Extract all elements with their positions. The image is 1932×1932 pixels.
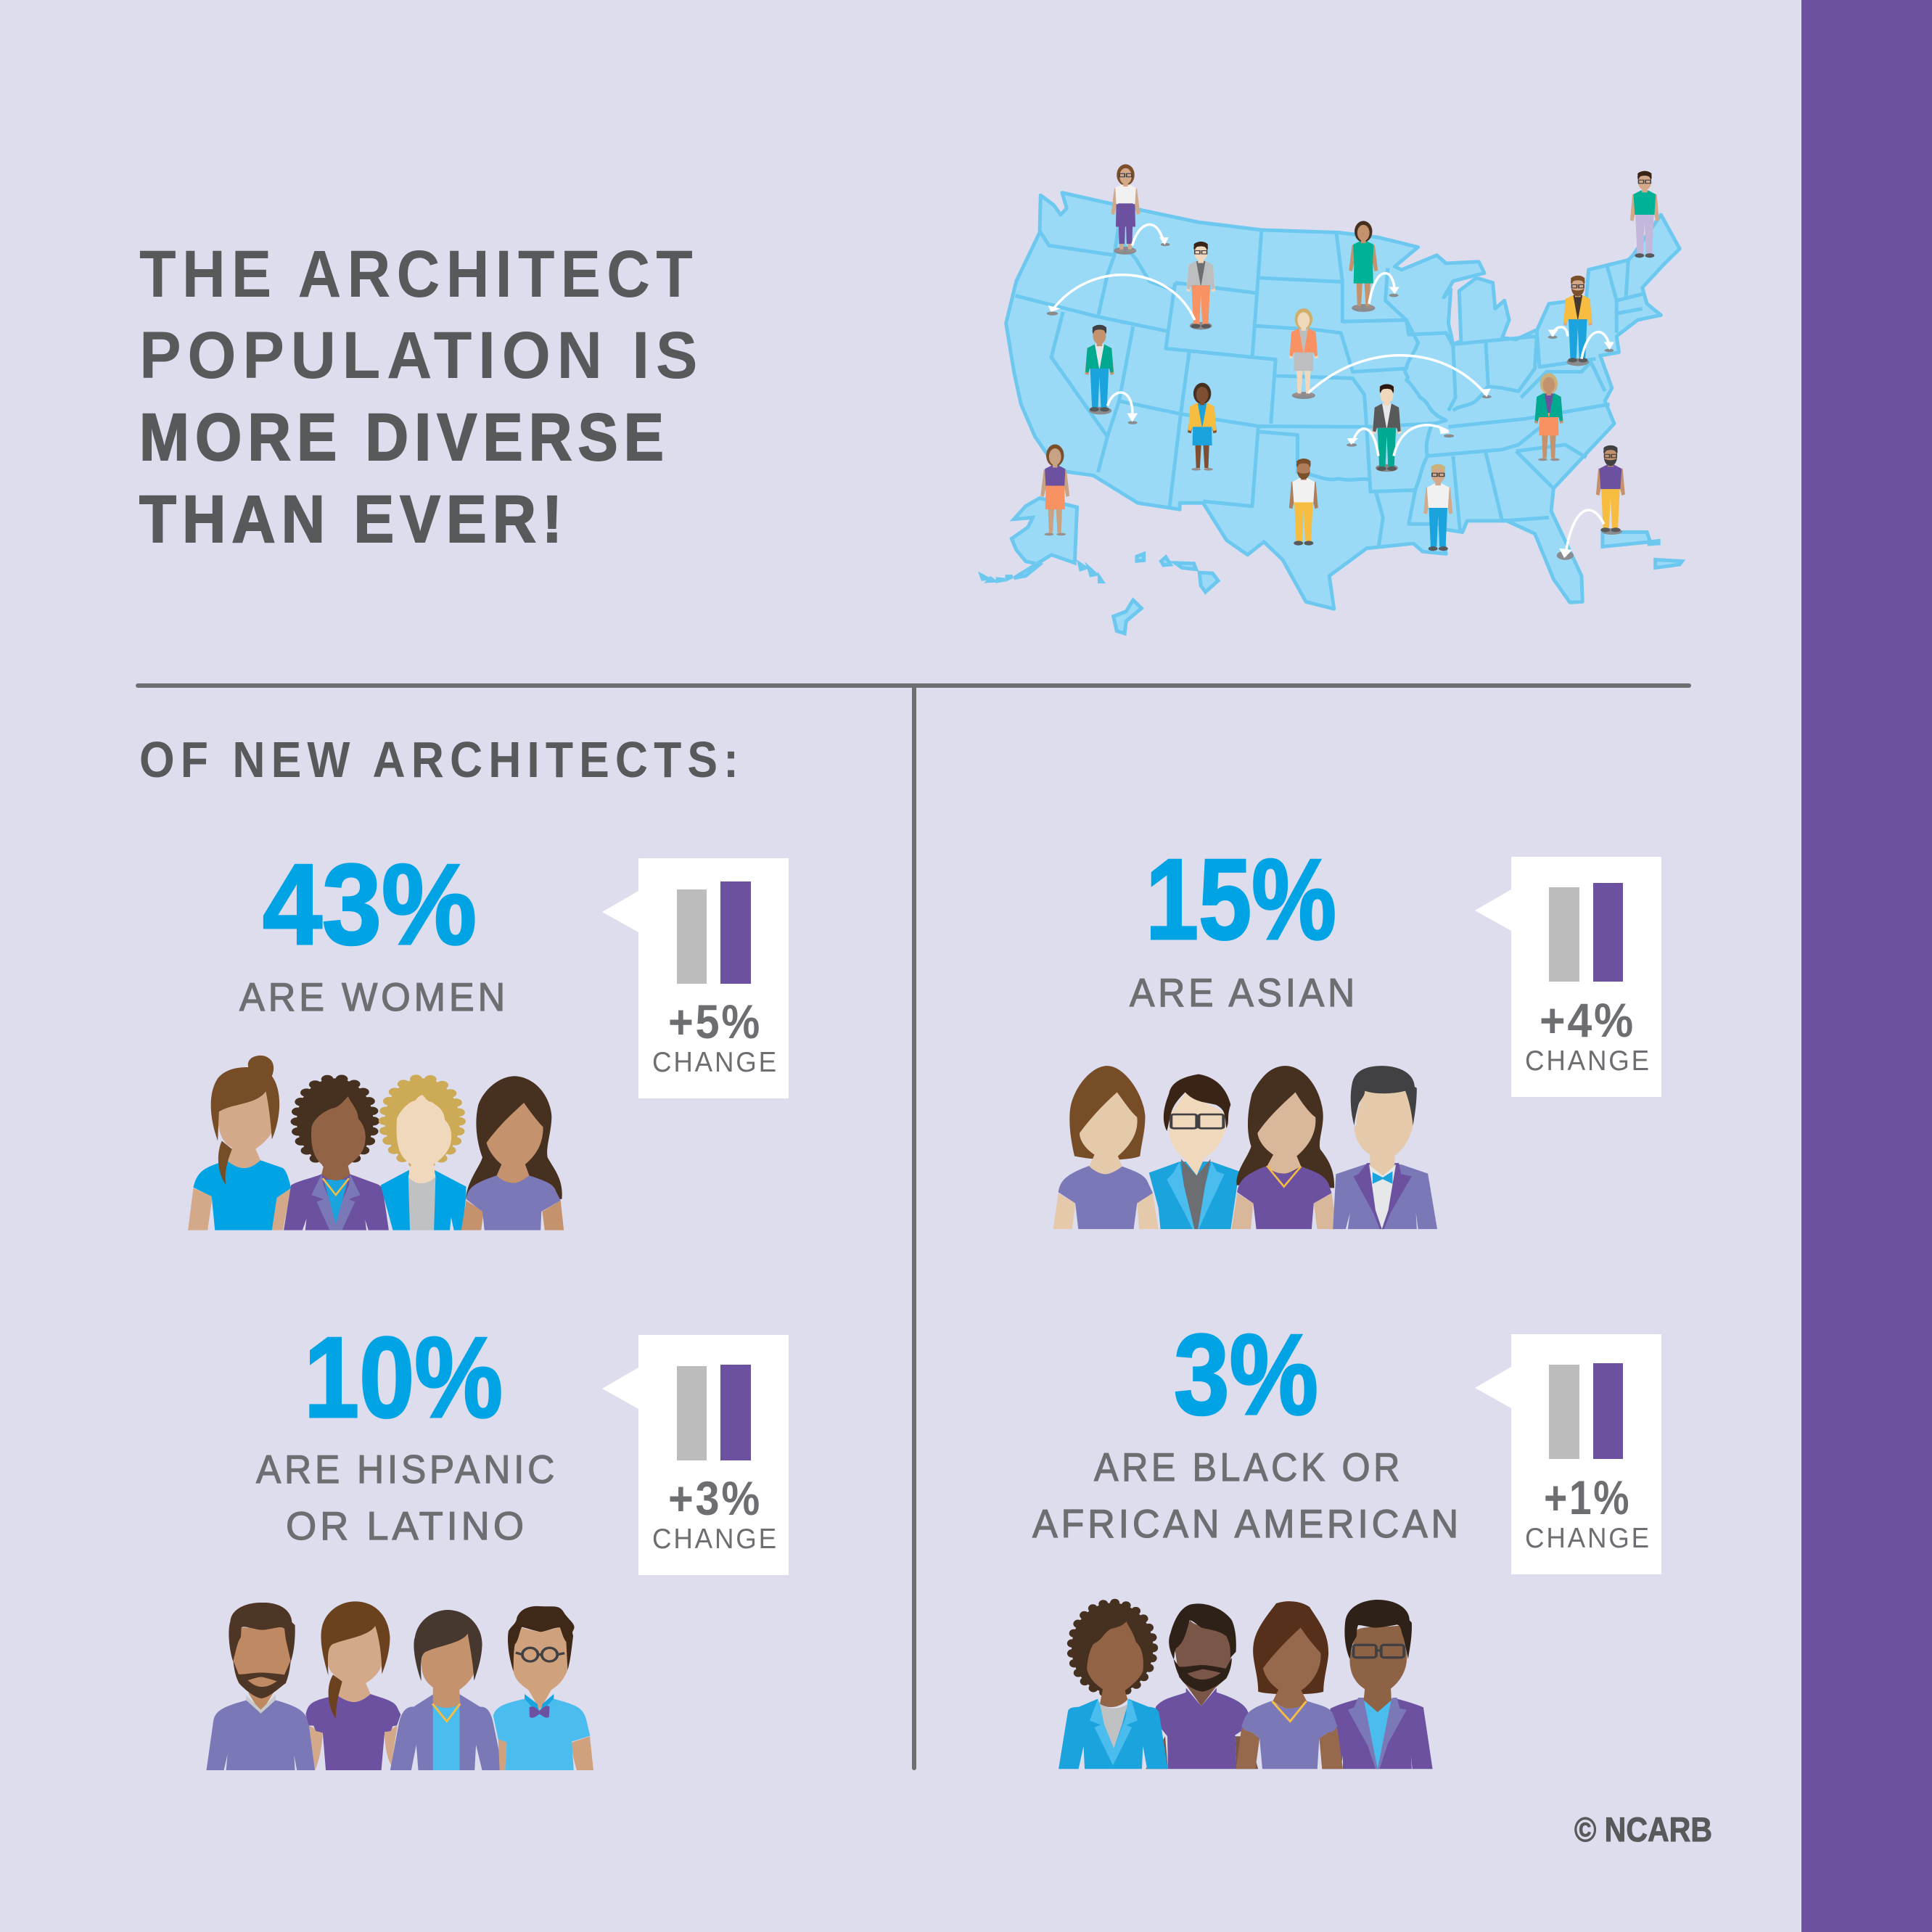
woman with curly dark hair	[284, 1078, 389, 1230]
illustration: four Black architects	[1059, 1600, 1433, 1769]
label: AFRICAN AMERICAN	[1032, 1501, 1462, 1546]
woman with long dark hair	[1232, 1066, 1337, 1229]
illustration: four women	[188, 1056, 564, 1230]
destination markers	[1047, 243, 1622, 560]
arrow heads	[1048, 237, 1614, 558]
woman with ponytail	[305, 1601, 400, 1770]
person: woman in purple trousers	[1111, 164, 1140, 252]
person: man in white shirt, yellow trousers	[1289, 459, 1318, 546]
callout: CHANGE	[1525, 1523, 1651, 1554]
bearded man	[1146, 1603, 1258, 1769]
bar chart	[1549, 883, 1623, 982]
map of the United States with relocating architects	[982, 164, 1682, 633]
woman with bob	[1236, 1601, 1343, 1769]
bar chart	[677, 881, 751, 984]
stat: 3%: 3%	[1174, 1311, 1318, 1439]
person: woman in teal dress	[1349, 221, 1378, 308]
woman with long dark hair	[461, 1076, 564, 1230]
bearded man	[206, 1603, 315, 1770]
callout: CHANGE	[652, 1524, 778, 1555]
callout: CHANGE	[1525, 1045, 1651, 1077]
title	[139, 237, 704, 556]
illustration: four Hispanic architects	[206, 1601, 593, 1770]
map: contiguous states	[1006, 193, 1680, 609]
stat: 10%: 10%	[304, 1314, 503, 1442]
man with bow tie	[1333, 1066, 1437, 1229]
panel: Black or African American	[1032, 1311, 1661, 1769]
stat: 15%: 15%	[1146, 836, 1336, 963]
label: ARE WOMEN	[239, 974, 509, 1019]
person: man in yellow jacket	[1563, 276, 1592, 363]
person: man in white shirt, blue trousers	[1423, 464, 1452, 551]
title: MORE DIVERSE	[139, 400, 670, 474]
bar chart	[677, 1365, 751, 1460]
map: Alaska	[1011, 498, 1077, 578]
label: ARE BLACK OR	[1094, 1444, 1403, 1489]
person: woman in green jacket	[1534, 373, 1563, 461]
label: OR LATINO	[286, 1503, 527, 1548]
callout	[1475, 1334, 1661, 1574]
callout	[602, 1335, 789, 1575]
woman with curly hair	[1059, 1603, 1168, 1769]
callout: +3%	[668, 1471, 762, 1525]
panel: Asian	[1053, 836, 1661, 1229]
title: THAN EVER!	[139, 482, 568, 556]
illustration: four Asian architects	[1053, 1066, 1437, 1229]
man with glasses	[1149, 1074, 1239, 1229]
woman with curly blonde hair	[381, 1078, 466, 1230]
title: THE ARCHITECT	[139, 237, 699, 311]
person: man in grey jacket	[1186, 242, 1215, 329]
person: man in dark jacket	[1372, 384, 1401, 471]
map: islands	[982, 532, 1682, 633]
man with round glasses	[493, 1606, 593, 1770]
stat: 43%: 43%	[263, 841, 477, 969]
callout: +4%	[1540, 993, 1635, 1047]
callout: +1%	[1544, 1471, 1631, 1524]
label: ARE ASIAN	[1130, 970, 1358, 1015]
person: woman in yellow jacket	[1188, 383, 1217, 471]
section heading: OF NEW ARCHITECTS:	[139, 731, 744, 788]
panel: women	[188, 841, 789, 1230]
title: POPULATION IS	[139, 318, 704, 392]
person: man in teal shirt	[1630, 171, 1659, 258]
panel: Hispanic or Latino	[206, 1314, 789, 1770]
person: woman in purple top	[1040, 444, 1069, 535]
person: blonde woman in orange jacket	[1289, 308, 1318, 396]
callout: +5%	[668, 995, 762, 1048]
divider lines	[138, 686, 1689, 1768]
callout	[602, 858, 789, 1098]
woman in jacket	[390, 1610, 503, 1770]
woman with bun	[188, 1056, 291, 1230]
purple side band	[1801, 0, 1932, 1932]
label	[256, 1447, 558, 1548]
label: ARE HISPANIC	[256, 1447, 558, 1492]
relocation arcs	[1052, 224, 1610, 556]
woman with brown bob	[1053, 1066, 1159, 1229]
copyright: © NCARB	[1574, 1810, 1712, 1849]
callout	[1475, 857, 1661, 1097]
person: man in green jacket	[1085, 325, 1114, 411]
callout: CHANGE	[652, 1047, 778, 1078]
bar chart	[1549, 1363, 1623, 1459]
label	[1032, 1444, 1462, 1546]
man with rectangular glasses	[1323, 1600, 1433, 1769]
person: man in purple shirt	[1596, 445, 1625, 532]
people on map	[1040, 164, 1659, 551]
